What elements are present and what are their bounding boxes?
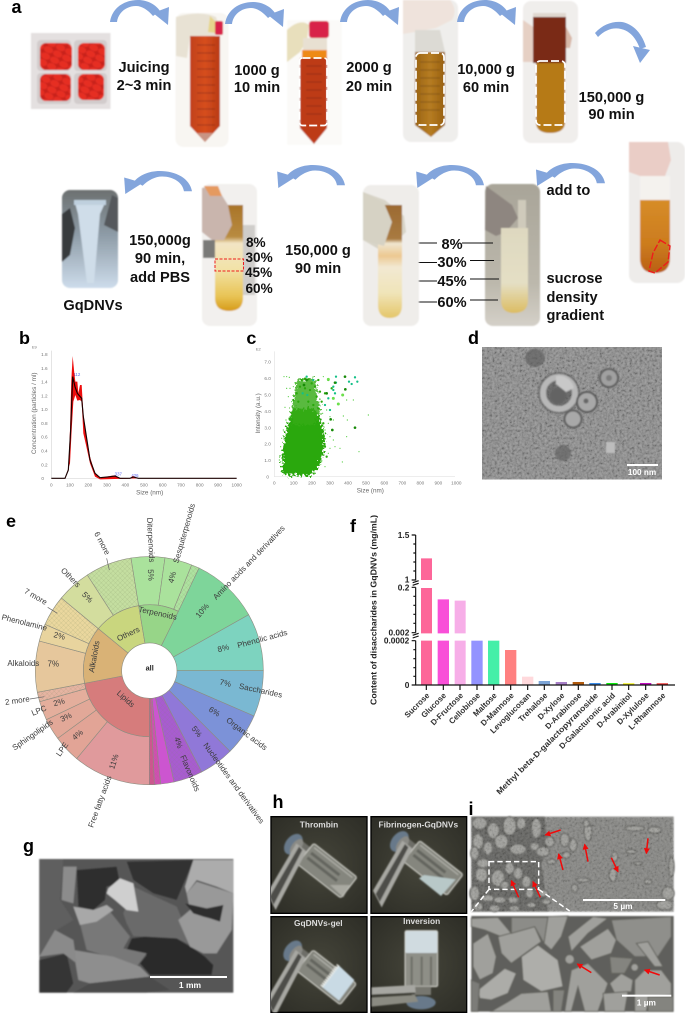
axes c: 4.0 bbox=[264, 409, 271, 414]
y tick labels bbox=[384, 530, 410, 690]
x category labels: D-Arabinitol bbox=[595, 691, 634, 730]
axes c: E2 bbox=[256, 347, 262, 352]
sunburst labels: 5% bbox=[80, 590, 95, 605]
sunburst labels: Lipids bbox=[115, 689, 136, 709]
label 150,000 g: 90 min bbox=[588, 107, 635, 123]
arrow 5 bbox=[595, 22, 650, 63]
percent labels beside tube: 8% bbox=[246, 235, 266, 250]
sunburst labels: Sphingolipids bbox=[11, 718, 55, 752]
panel g: SEM of gel bbox=[23, 836, 233, 993]
axes b: 0.4 bbox=[41, 448, 48, 453]
panel letter d: d bbox=[468, 328, 479, 348]
hatched others wedges bbox=[37, 558, 202, 785]
label PBS step: 150,000g bbox=[129, 233, 191, 249]
gradient leader lines bbox=[406, 243, 499, 302]
axes c: 900 bbox=[434, 480, 443, 485]
label juicing: 2~3 min bbox=[117, 78, 171, 94]
sunburst labels: 6% bbox=[207, 705, 222, 719]
axes b: 0 bbox=[50, 483, 53, 488]
x category labels: D-Xylulose bbox=[615, 691, 651, 727]
panel letter f: f bbox=[350, 516, 357, 536]
scale bar upper bbox=[583, 899, 665, 901]
axes b: 1000 bbox=[231, 483, 242, 488]
panel letter g: g bbox=[23, 836, 34, 856]
sunburst labels: LPC bbox=[30, 703, 48, 718]
dashed selection tube 2 bbox=[300, 58, 327, 126]
label sucrose density gradient: sucrose bbox=[546, 271, 602, 287]
photo: layered tube bbox=[363, 185, 419, 326]
SEM upper image bbox=[470, 817, 674, 912]
sunburst labels: Terpenoids bbox=[138, 605, 178, 622]
axes b bbox=[31, 345, 242, 496]
x category labels: Cellobiose bbox=[447, 691, 482, 726]
bars bbox=[421, 558, 668, 685]
axes b: 1.4 bbox=[41, 380, 48, 385]
scale label upper: 5 µm bbox=[613, 901, 633, 911]
panel letter c: c bbox=[246, 328, 256, 348]
label PBS step: add PBS bbox=[130, 270, 190, 286]
axes c: 3.0 bbox=[264, 425, 271, 430]
arrow 2 bbox=[225, 2, 284, 27]
sunburst labels: Others bbox=[59, 566, 82, 589]
sunburst labels: 8% bbox=[217, 642, 230, 654]
scatter cloud upper bbox=[291, 378, 321, 425]
panel a: isolation workflow bbox=[12, 0, 685, 326]
panel b: size distribution chart bbox=[19, 328, 242, 496]
gradient percent labels: 45% bbox=[437, 274, 467, 290]
axes c: Size (nm) bbox=[357, 487, 384, 494]
TEM background bbox=[482, 347, 662, 480]
SEM image g bbox=[39, 859, 233, 993]
panel letter e: e bbox=[6, 511, 16, 531]
photo: right amber tube bbox=[629, 142, 685, 283]
axes b: 0.2 bbox=[41, 462, 48, 467]
y tick labels: 0.2 bbox=[398, 582, 410, 592]
x category labels: Methyl beta-D-galactopyranoside bbox=[495, 691, 601, 796]
photo: tube 3 bbox=[403, 0, 458, 142]
sunburst labels: 4% bbox=[172, 736, 184, 750]
SEM grain i bbox=[471, 817, 674, 912]
x category labels: D-Arabinose bbox=[543, 691, 584, 731]
scatter dots bbox=[279, 377, 368, 467]
panel e: sunburst chart bbox=[1, 502, 288, 829]
arrow 9 bbox=[124, 171, 192, 194]
scale bar g bbox=[150, 976, 227, 978]
y tick labels: 0.002 bbox=[388, 627, 410, 637]
sunburst labels: Diterpenoids bbox=[145, 517, 156, 563]
arrow 3 bbox=[340, 0, 399, 25]
panel c: scatter chart bbox=[246, 328, 462, 494]
axes b: 112 bbox=[73, 372, 81, 377]
gradient percent labels: 60% bbox=[437, 295, 467, 311]
x category labels: Trehalose bbox=[517, 691, 550, 724]
photo: thrombin: Thrombin bbox=[300, 819, 338, 829]
panel f: bar chart bbox=[350, 515, 675, 796]
panel letter i: i bbox=[468, 799, 474, 819]
scale label lower: 1 µm bbox=[637, 997, 656, 1007]
x category labels: Glucose bbox=[419, 691, 448, 720]
label 150,000 g step: 150,000 g bbox=[285, 243, 351, 259]
sunburst wedges bbox=[35, 557, 263, 785]
axes b: E9 bbox=[32, 345, 38, 350]
label add to: add to bbox=[546, 183, 590, 199]
x category labels: L-Rhamnose bbox=[627, 691, 668, 732]
axes c: 0 bbox=[273, 480, 276, 485]
sunburst labels: 7 more bbox=[23, 587, 49, 607]
axes b: 100 bbox=[66, 483, 74, 488]
mean curve bbox=[51, 377, 237, 478]
x category labels: Sucrose bbox=[403, 691, 432, 720]
sunburst labels: Organic acids bbox=[224, 716, 269, 752]
x category labels: Levoglucosan bbox=[488, 691, 533, 735]
axes b: 337 bbox=[115, 472, 122, 477]
photo: tube 4 bbox=[523, 1, 578, 143]
center label all: all bbox=[146, 664, 154, 673]
axes c: 1.0 bbox=[264, 458, 271, 463]
axes b: 426 bbox=[131, 473, 139, 478]
label 150,000 g: 150,000 g bbox=[579, 90, 644, 106]
label PBS step: 90 min, bbox=[135, 251, 185, 267]
dashed red band bbox=[215, 259, 244, 271]
axes c: 2.0 bbox=[264, 442, 271, 447]
axes b: 400 bbox=[121, 483, 130, 488]
photo: GqDNVs-gel bbox=[266, 917, 367, 1013]
sunburst labels: Alkaloids bbox=[87, 640, 102, 673]
sunburst labels: Amino acids and derivatives bbox=[211, 524, 287, 602]
axes b: 1.8 bbox=[41, 352, 48, 357]
axes b: 800 bbox=[196, 483, 204, 488]
arrow 7 bbox=[416, 165, 484, 188]
axes c: 700 bbox=[398, 480, 407, 485]
x category labels: D-Fructose bbox=[429, 691, 465, 727]
photo: goji berries in box bbox=[31, 33, 110, 109]
arrow 8 bbox=[277, 165, 345, 188]
axes c: 7.0 bbox=[264, 360, 271, 365]
axes b: 600 bbox=[159, 483, 167, 488]
axes b: Size (nm) bbox=[136, 489, 163, 496]
axes b: 1.0 bbox=[41, 407, 48, 412]
curve band bbox=[65, 356, 138, 479]
scale bar lower bbox=[622, 995, 671, 997]
scale label g: 1 mm bbox=[179, 980, 202, 990]
sunburst labels: 2 more bbox=[4, 694, 31, 707]
arrow 4 bbox=[457, 0, 516, 25]
axes c: 400 bbox=[344, 480, 352, 485]
label juicing: Juicing bbox=[118, 60, 170, 76]
photo: GqDNVs-gel: GqDNVs-gel bbox=[294, 918, 343, 928]
axes c: 200 bbox=[308, 480, 316, 485]
sunburst labels: Free fatty acids bbox=[86, 774, 114, 829]
axes b: Concentration (particles / ml) bbox=[31, 372, 38, 454]
SEM lower image bbox=[471, 916, 674, 1012]
axes b: 500 bbox=[140, 483, 148, 488]
sunburst labels: Saccharides bbox=[238, 682, 283, 700]
label 1000 g: 1000 g bbox=[234, 63, 280, 79]
y axis title: Content of disaccharides in GqDNVs (mg/mL) bbox=[369, 515, 379, 705]
label sucrose density gradient: density bbox=[546, 290, 598, 306]
red arrows bbox=[511, 830, 660, 975]
x category labels: D-Xylose bbox=[536, 691, 567, 722]
label 2000 g: 2000 g bbox=[346, 60, 392, 76]
arrow 6 bbox=[536, 163, 605, 186]
axes b: 200 bbox=[84, 483, 93, 488]
dashed selection tube 3 bbox=[416, 53, 444, 125]
scatter cloud bbox=[282, 408, 325, 475]
sunburst labels: LPE bbox=[54, 741, 70, 758]
sunburst labels: 6 more bbox=[92, 530, 112, 557]
axes c: 0 bbox=[266, 474, 269, 479]
percent labels beside tube: 30% bbox=[246, 250, 273, 265]
axes c: 6.0 bbox=[264, 376, 271, 381]
label 150,000 g step: 90 min bbox=[295, 261, 341, 277]
label 10,000 g: 60 min bbox=[463, 80, 509, 96]
sunburst leader lines bbox=[30, 558, 109, 699]
axes c: 5.0 bbox=[264, 392, 271, 397]
axes c: Intensity (a.u.) bbox=[255, 393, 262, 433]
label GqDNVs: GqDNVs bbox=[63, 298, 123, 314]
dashed red region bbox=[649, 240, 670, 273]
percent labels beside tube: 45% bbox=[245, 265, 272, 280]
axes b: 1.6 bbox=[41, 366, 48, 371]
panel d: TEM micrograph bbox=[468, 328, 662, 480]
x category labels: D-Galacturonic acid bbox=[557, 691, 617, 751]
sunburst labels: Nucleotides and derivatives bbox=[201, 741, 266, 825]
y tick labels: 1.5 bbox=[398, 530, 410, 540]
panel i: SEM of vesicles in gel bbox=[468, 799, 674, 1012]
photo: tube 2 bbox=[287, 20, 342, 145]
axes b: 0.8 bbox=[41, 421, 48, 426]
y tick labels: 1 bbox=[405, 575, 410, 585]
sunburst labels: Alkaloids bbox=[7, 659, 39, 668]
sunburst labels: Others bbox=[116, 625, 141, 643]
photo: gradient tube bbox=[485, 184, 540, 326]
dashed selection tube 4 bbox=[536, 61, 565, 125]
panel letter b: b bbox=[19, 328, 30, 348]
y tick labels: 0.0002 bbox=[384, 636, 410, 646]
TEM scale bar bbox=[627, 464, 658, 466]
percent labels beside tube: 60% bbox=[246, 281, 273, 296]
label sucrose density gradient: gradient bbox=[546, 308, 604, 324]
sunburst labels: 7% bbox=[48, 659, 59, 668]
axes b: 0 bbox=[41, 476, 44, 481]
sunburst labels: Flavonoids bbox=[178, 754, 202, 793]
gradient percent labels: 30% bbox=[437, 255, 467, 271]
axes c: 100 bbox=[290, 480, 298, 485]
zoom selection box bbox=[471, 862, 570, 912]
panel h: gel vial photos bbox=[266, 792, 467, 1013]
axes b: 300 bbox=[103, 483, 111, 488]
sunburst labels: Phenolic acids bbox=[236, 628, 288, 650]
photo: fibrinogen-GqDNVs bbox=[371, 817, 467, 913]
x category labels: Maltose bbox=[471, 691, 499, 718]
photo: separated tube bbox=[202, 184, 257, 326]
label 2000 g: 20 min bbox=[346, 79, 392, 95]
broken y axis and x axis bbox=[412, 535, 675, 690]
sunburst labels: 5% bbox=[190, 724, 204, 739]
axes c bbox=[255, 347, 462, 494]
sunburst labels: 7% bbox=[219, 678, 232, 689]
sunburst labels: Sesquiterpenoids bbox=[172, 502, 197, 564]
sunburst labels: 4% bbox=[70, 728, 85, 742]
photo: GqDNVs eppendorf tube bbox=[62, 190, 118, 288]
arrow 1 bbox=[110, 0, 169, 25]
vesicles bbox=[525, 349, 619, 461]
axes c: 800 bbox=[416, 480, 425, 485]
gradient percent labels: 8% bbox=[441, 237, 463, 253]
axes b: 900 bbox=[214, 483, 222, 488]
label 10,000 g: 10,000 g bbox=[457, 62, 515, 78]
label 1000 g: 10 min bbox=[234, 80, 280, 96]
y tick labels: 0 bbox=[405, 680, 410, 690]
photo: thrombin bbox=[267, 817, 367, 913]
photo: inversion bbox=[371, 916, 467, 1012]
axes b: 0.6 bbox=[41, 435, 48, 440]
sunburst labels: 4% bbox=[166, 571, 178, 584]
panel letter h: h bbox=[272, 792, 284, 812]
sunburst labels bbox=[1, 502, 288, 829]
TEM grain texture bbox=[482, 347, 662, 480]
sunburst labels: 3% bbox=[59, 711, 73, 724]
TEM scale label: 100 nm bbox=[628, 468, 656, 477]
axes c: 600 bbox=[380, 480, 389, 485]
photo: inversion: Inversion bbox=[403, 916, 440, 926]
axes c: 500 bbox=[362, 480, 370, 485]
sunburst labels: Phenolamine bbox=[1, 613, 49, 633]
sunburst labels: 10% bbox=[194, 602, 211, 620]
axes c: 300 bbox=[326, 480, 334, 485]
x category labels: D-Mannose bbox=[479, 691, 516, 728]
axes c: 1000 bbox=[451, 480, 462, 485]
sunburst labels: 11% bbox=[107, 753, 121, 770]
sunburst labels: 5% bbox=[146, 569, 155, 581]
sunburst labels: 2% bbox=[52, 696, 66, 708]
x category labels bbox=[403, 691, 668, 796]
axes b: 700 bbox=[177, 483, 185, 488]
photo: tube 1 bbox=[176, 13, 228, 147]
photo: fibrinogen-GqDNVs: Fibrinogen-GqDNVs bbox=[379, 819, 458, 829]
axes b: 1.2 bbox=[41, 394, 48, 399]
sunburst labels: 2% bbox=[53, 630, 66, 642]
